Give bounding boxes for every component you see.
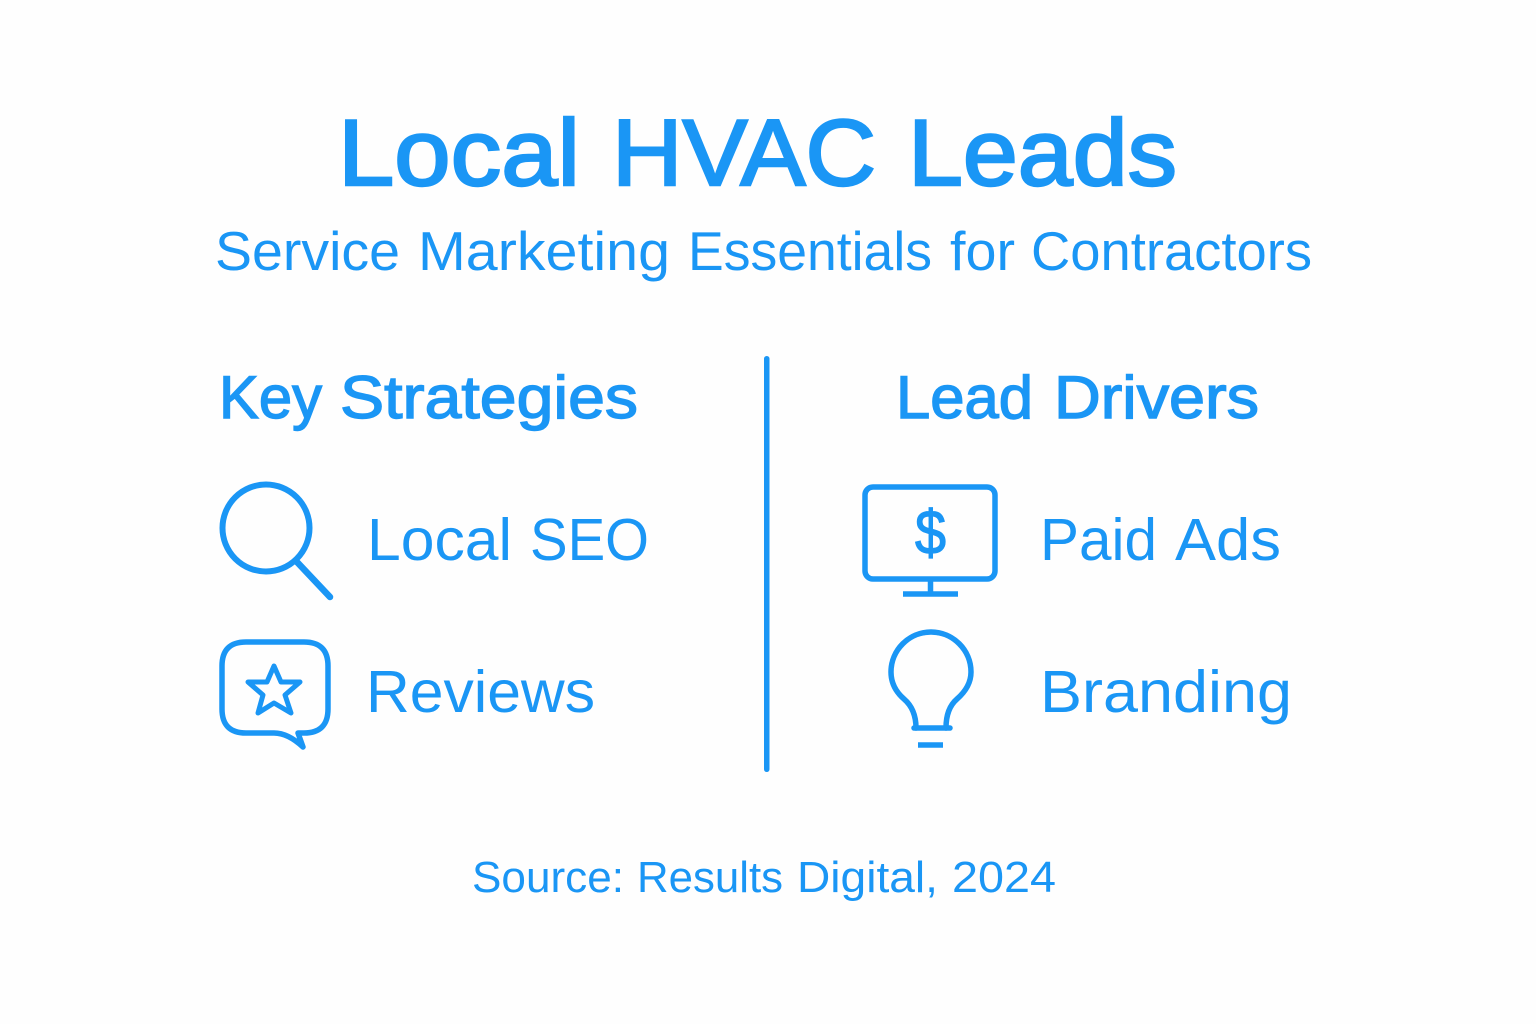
heading: key strategies: Strategies (340, 364, 638, 431)
subtitle (215, 220, 1312, 282)
subtitle: Marketing (418, 220, 670, 282)
icon: magnifying glass (222, 484, 330, 597)
subtitle: Essentials (688, 220, 932, 282)
source note: Digital, (797, 853, 938, 902)
source note: Source: (472, 853, 624, 902)
label: paid ads: Ads (1175, 507, 1281, 573)
label: reviews: Reviews (366, 659, 595, 725)
title: HVAC (612, 100, 876, 205)
title: Leads (908, 100, 1177, 205)
icon: monitor with dollar: $ (915, 499, 946, 568)
label: paid ads (1040, 507, 1281, 573)
label: local seo: Local (367, 507, 512, 573)
source note: Results (637, 853, 783, 902)
label: paid ads: Paid (1040, 507, 1157, 573)
source note (472, 853, 1056, 902)
subtitle: for (950, 220, 1015, 282)
label: local seo: SEO (530, 507, 649, 573)
title: Local (338, 100, 580, 205)
divider (764, 356, 770, 772)
source note: 2024 (952, 853, 1056, 902)
label: branding: Branding (1040, 659, 1292, 725)
subtitle: Contractors (1031, 220, 1312, 282)
subtitle: Service (215, 220, 400, 282)
icon: monitor with dollar (865, 487, 995, 594)
heading: key strategies: Key (219, 364, 322, 431)
heading: lead drivers: Drivers (1054, 364, 1259, 431)
title (338, 100, 1177, 205)
heading: lead drivers: Lead (896, 364, 1033, 431)
heading: lead drivers (896, 364, 1259, 431)
panel: key strategies (219, 364, 649, 747)
label: local seo (367, 507, 649, 573)
icon: review bubble with star (222, 642, 328, 747)
icon: light bulb (891, 632, 971, 745)
panel: lead drivers (865, 364, 1292, 745)
heading: key strategies (219, 364, 638, 431)
